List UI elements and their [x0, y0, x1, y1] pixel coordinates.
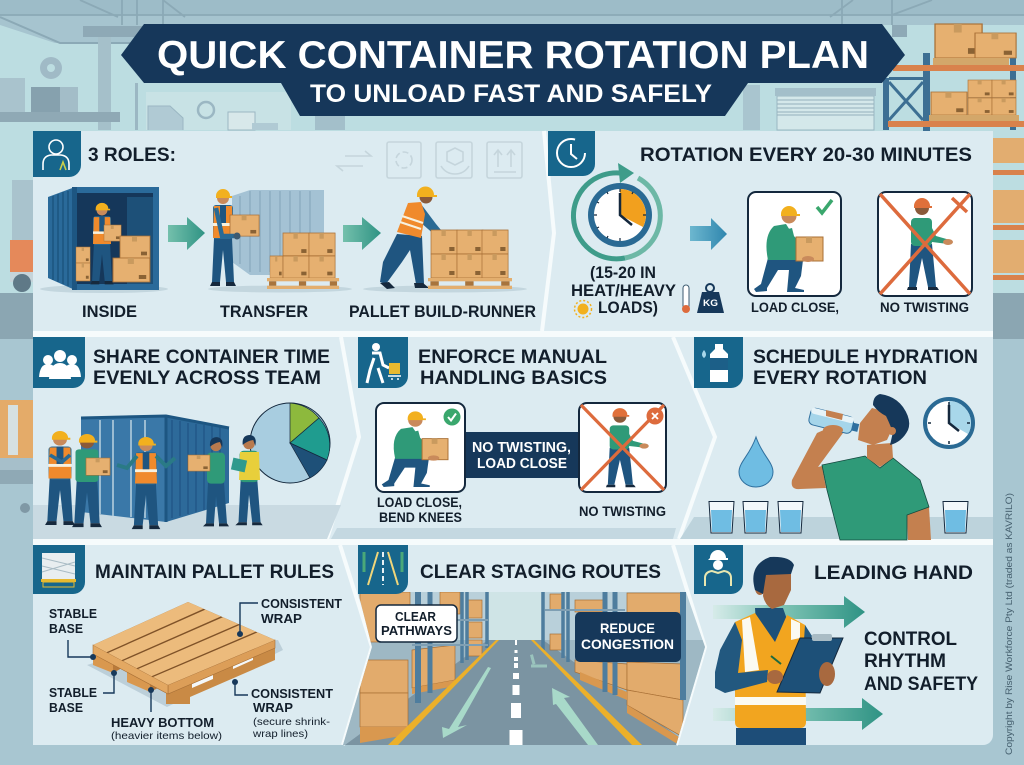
floor band [331, 528, 676, 539]
callout: clear pathways: CLEAR [395, 610, 436, 624]
arrow top [713, 596, 865, 628]
label: consistent wrap bottom: WRAP [253, 700, 293, 715]
text: heat/heavy loads: (15-20 IN [590, 263, 656, 282]
title: QUICK CONTAINER ROTATION PLAN [157, 34, 869, 77]
text: heat/heavy loads: LOADS) [598, 298, 658, 317]
icon: kg weight [697, 284, 724, 313]
icon: sun [574, 300, 592, 318]
card: load close [748, 192, 841, 296]
label: inside: INSIDE [82, 302, 137, 321]
icon: bottle tab [694, 337, 743, 388]
panel: clear staging routes [340, 545, 710, 747]
label: consistent wrap bottom: wrap lines) [252, 728, 308, 740]
callout: reduce congestion: CONGESTION [581, 636, 674, 652]
text: heat/heavy loads [571, 263, 677, 317]
panel: background sheet [33, 131, 993, 745]
heading: EVENLY ACROSS TEAM [93, 367, 321, 389]
panel: rotation every 20-30 minutes [548, 131, 972, 318]
callout: no twisting, load close: LOAD CLOSE [477, 456, 567, 472]
icon: team tab [33, 337, 85, 388]
icon: clock [925, 399, 973, 447]
heading [753, 346, 978, 389]
illustration: container [81, 416, 229, 522]
icon: road tab [358, 545, 408, 594]
heading [418, 346, 607, 389]
callout: no twisting, load close [465, 432, 579, 478]
illustration: worker inside container [40, 187, 168, 293]
icons: faded handling symbols [337, 142, 522, 178]
workers [45, 431, 263, 529]
panel: share container time [33, 337, 341, 539]
icon: water drop [739, 437, 773, 487]
text: control rhythm and safety: RHYTHM [864, 651, 946, 672]
heading: 3 roles: 3 ROLES: [88, 144, 176, 166]
panel: maintain pallet rules [33, 545, 342, 742]
label: heavy bottom: HEAVY BOTTOM [111, 715, 214, 730]
panel dividers [33, 131, 993, 745]
label: stable base top: STABLE [49, 606, 97, 621]
heading: ENFORCE MANUAL [418, 346, 607, 368]
label: load close, bend knees: BEND KNEES [379, 509, 462, 525]
label: consistent wrap top: CONSISTENT [261, 596, 342, 611]
floor band [680, 517, 993, 539]
callout: reduce congestion [575, 612, 681, 662]
illustration: leading hand [715, 557, 843, 745]
label: no twisting: NO TWISTING [880, 299, 969, 315]
panel: leading hand [694, 545, 978, 745]
label: consistent wrap bottom [251, 686, 333, 740]
heading: HANDLING BASICS [420, 367, 607, 389]
text: control rhythm and safety: CONTROL [864, 629, 957, 650]
heading: SCHEDULE HYDRATION [753, 346, 978, 368]
illustration: warehouse aisle [340, 592, 710, 747]
illustration: pallet build runner [363, 186, 527, 292]
label: load close, bend knees: LOAD CLOSE, [377, 494, 462, 510]
title banner [121, 24, 905, 116]
icon: clock tab [548, 131, 595, 176]
icon: person tab [33, 131, 81, 177]
icon: water glasses [709, 502, 968, 533]
illustration: pallet [87, 602, 283, 707]
illustration: rotation clock [573, 163, 660, 259]
label: consistent wrap top [261, 596, 342, 626]
label: stable base bottom: BASE [49, 700, 83, 715]
label: load close, bend knees [377, 494, 462, 525]
icon: thermometer [682, 285, 690, 313]
copyright: Copyright by Rise Workforce Pty Ltd (traded as KAVRILO) [1004, 493, 1014, 755]
label: stable base top [49, 606, 97, 636]
subtitle: TO UNLOAD FAST AND SAFELY [310, 80, 712, 108]
icon: handling tab [358, 337, 408, 388]
text: heat/heavy loads: HEAT/HEAVY [571, 281, 677, 300]
label: consistent wrap bottom: CONSISTENT [251, 686, 333, 701]
panel: 3 roles [33, 131, 536, 321]
icon: supervisor tab [694, 545, 743, 594]
pie chart [250, 403, 330, 483]
label: heavy bottom [111, 715, 222, 742]
label: stable base bottom [49, 685, 97, 715]
callout: clear pathways [376, 605, 457, 642]
heading: LEADING HAND [814, 562, 973, 584]
illustration: person drinking [792, 394, 931, 540]
icon: kg weight: KG [703, 298, 718, 308]
callout: reduce congestion: REDUCE [600, 620, 655, 636]
callout: no twisting, load close: NO TWISTING, [472, 440, 571, 456]
label: load close: LOAD CLOSE, [751, 299, 839, 315]
card: no twisting [579, 403, 666, 492]
text: control rhythm and safety: AND SAFETY [864, 674, 978, 695]
icon: wrapped pallet tab [33, 545, 85, 594]
label: no twisting: NO TWISTING [579, 503, 666, 519]
label: consistent wrap top: WRAP [261, 611, 302, 626]
arrow [168, 217, 205, 250]
arrow [343, 217, 381, 250]
text: control rhythm and safety [864, 629, 978, 695]
floor band [33, 505, 341, 539]
arrow [690, 218, 727, 250]
label: pallet build-runner: PALLET BUILD-RUNNER [349, 302, 536, 321]
heading: SHARE CONTAINER TIME [93, 346, 330, 368]
panel: schedule hydration [680, 337, 993, 540]
callout: clear pathways: PATHWAYS [381, 624, 452, 638]
heading: CLEAR STAGING ROUTES [420, 561, 661, 583]
heading: MAINTAIN PALLET RULES [95, 561, 334, 583]
label: transfer: TRANSFER [220, 302, 308, 321]
label: heavy bottom: (heavier items below) [111, 730, 222, 742]
leader lines [68, 603, 258, 712]
label: stable base top: BASE [49, 621, 83, 636]
card: no twisting [878, 192, 972, 296]
label: stable base bottom: STABLE [49, 685, 97, 700]
panel: enforce manual handling [331, 337, 676, 539]
arrow bottom [713, 698, 883, 730]
heading: EVERY ROTATION [753, 367, 927, 389]
heading [93, 346, 330, 389]
heading: ROTATION EVERY 20-30 MINUTES [640, 144, 972, 166]
card: load close [376, 403, 465, 492]
label: consistent wrap bottom: (secure shrink- [253, 716, 331, 728]
illustration: transfer worker [208, 189, 352, 292]
